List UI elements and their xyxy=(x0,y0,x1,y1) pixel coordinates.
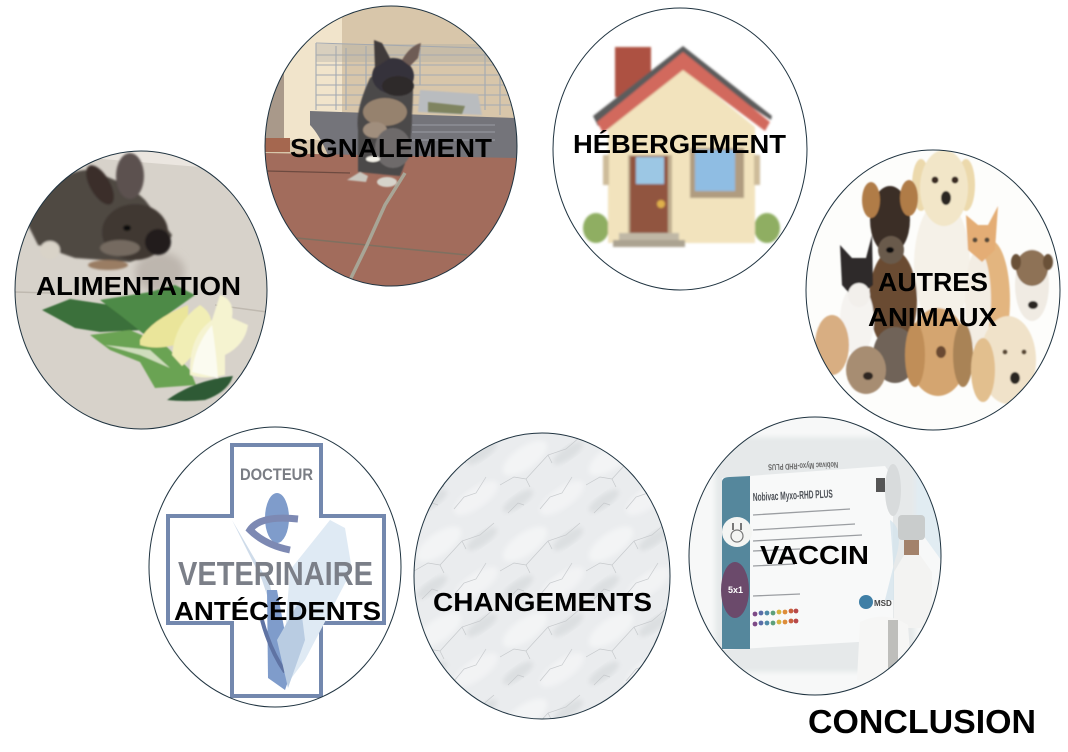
panel: vaccin: MSD xyxy=(874,599,892,608)
panel: signalement xyxy=(265,6,517,290)
icon: veterinary cross xyxy=(168,445,384,696)
label: autres animaux: ANIMAUX xyxy=(868,302,998,332)
panel: hébergement xyxy=(553,8,807,290)
package text xyxy=(753,489,862,596)
panel: changements xyxy=(414,433,670,719)
label: alimentation: ALIMENTATION xyxy=(36,271,241,301)
label: antécédents: ANTÉCÉDENTS xyxy=(174,596,381,626)
label: autres animaux xyxy=(868,267,998,332)
panel: autres animaux xyxy=(806,150,1060,430)
label: hébergement: HÉBERGEMENT xyxy=(573,129,786,159)
icon: veterinary cross: DOCTEUR xyxy=(240,465,313,484)
label: changements: CHANGEMENTS xyxy=(433,587,652,617)
icon: house xyxy=(583,46,780,247)
panel: vaccin: 5x1 xyxy=(728,585,743,595)
panel: vaccin xyxy=(689,417,941,695)
icon: veterinary cross: VETERINAIRE xyxy=(178,555,373,592)
panel: alimentation xyxy=(15,150,267,430)
label: autres animaux: AUTRES xyxy=(878,267,988,297)
label: signalement: SIGNALEMENT xyxy=(290,133,492,163)
heading: conclusion: CONCLUSION xyxy=(808,703,1036,740)
label: vaccin: VACCIN xyxy=(760,540,869,570)
vials xyxy=(898,515,925,540)
colour dots xyxy=(753,609,798,626)
panel: antécédents xyxy=(149,427,401,707)
package text: Nobivac Myxo-RHD PLUS xyxy=(753,489,833,504)
upside down label: Nobivac Myxo-RHD PLUS xyxy=(768,460,838,472)
shadow xyxy=(135,252,185,292)
cage xyxy=(316,43,515,115)
